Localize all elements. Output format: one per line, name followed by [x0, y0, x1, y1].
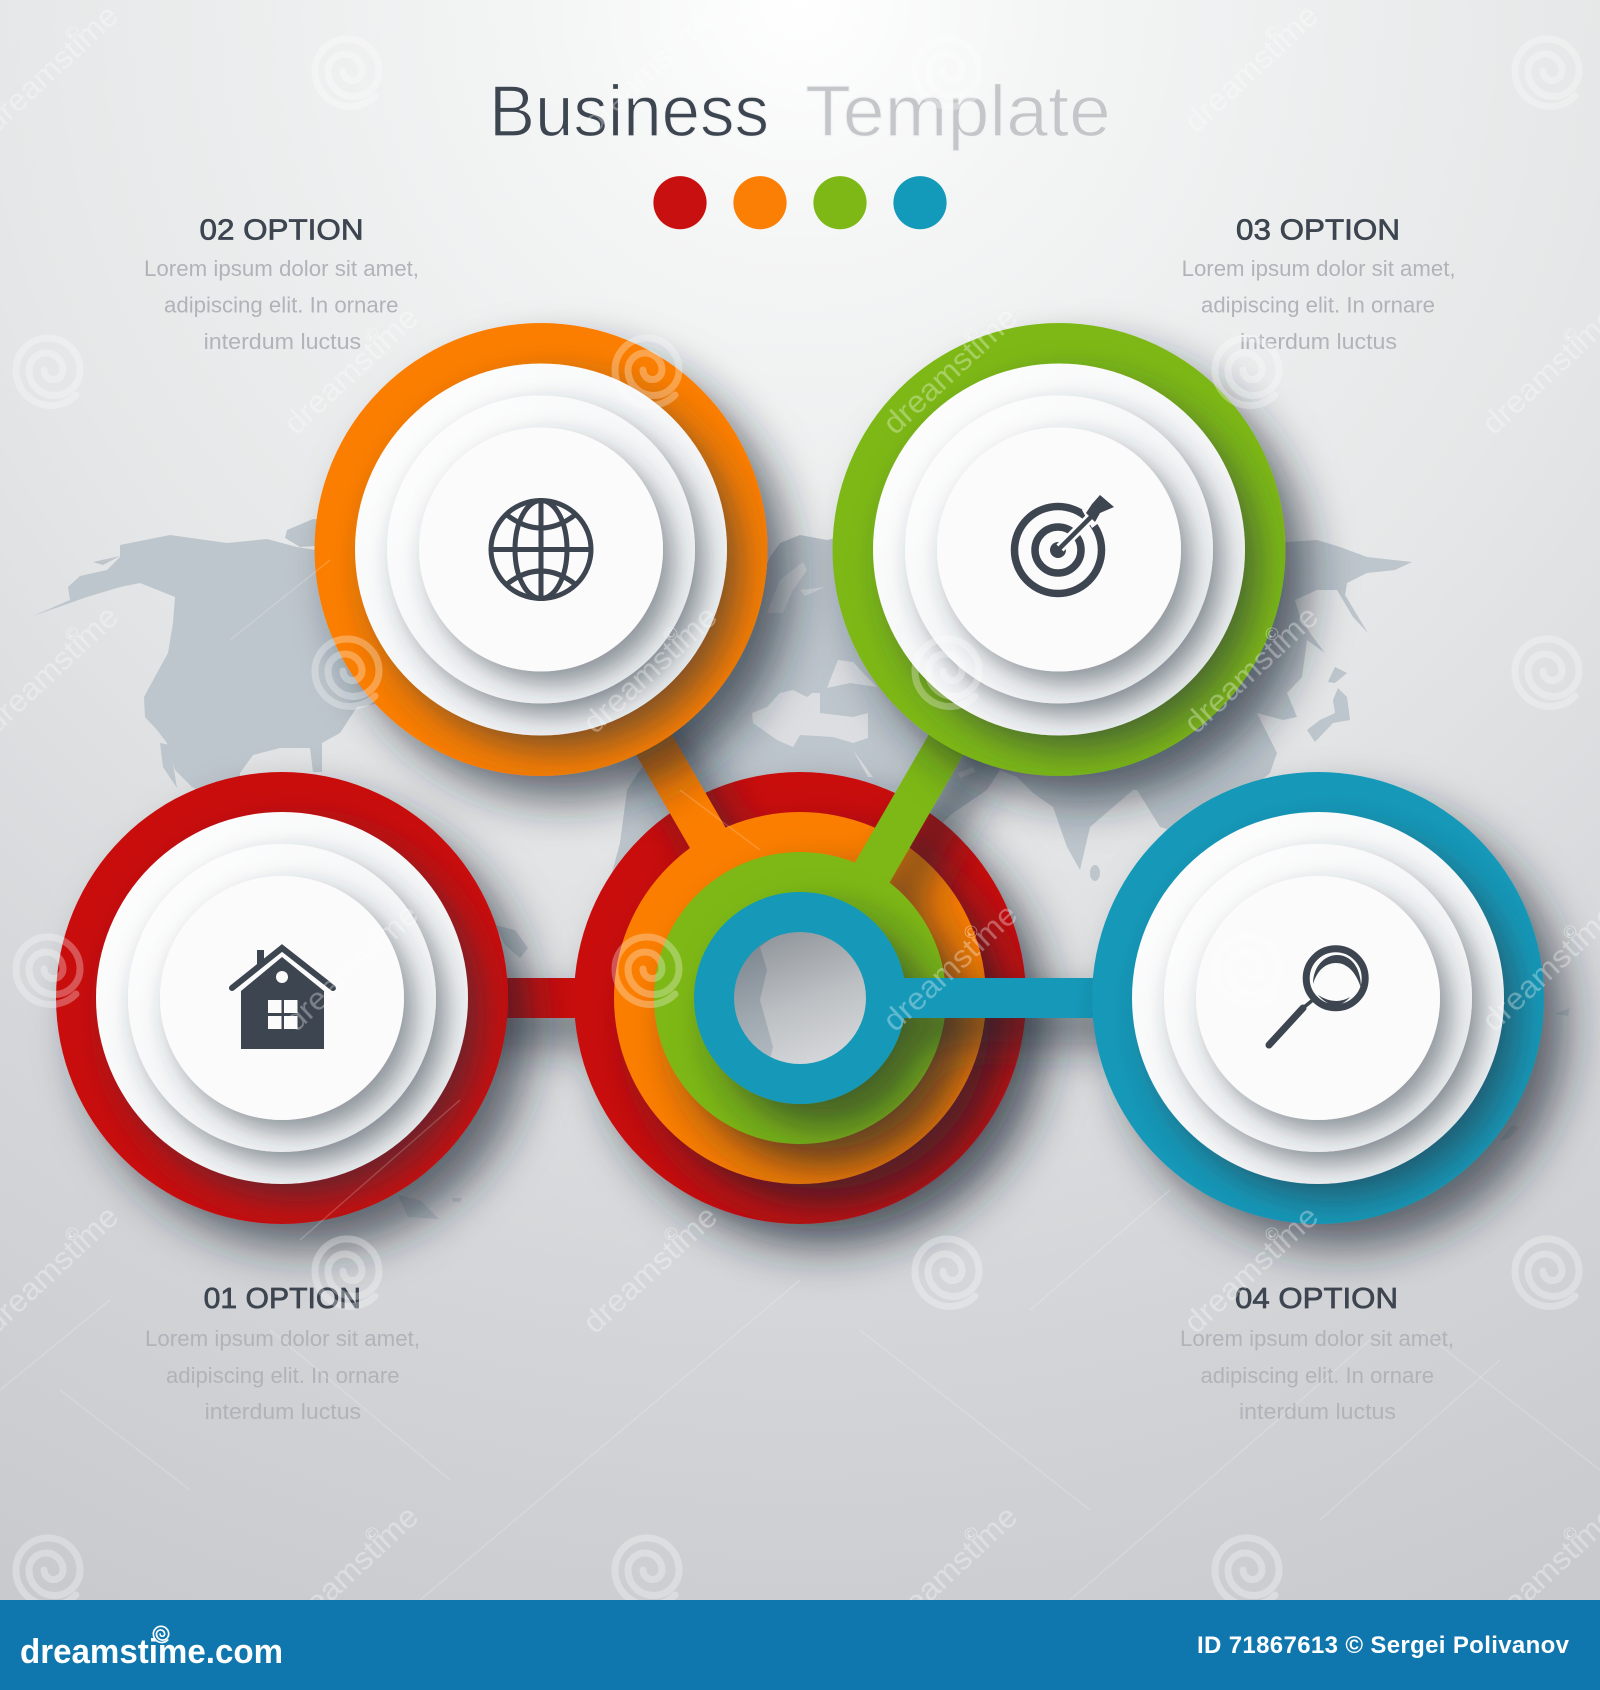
watermark: dreamstime text: dreamstime: [1177, 0, 1325, 139]
watermark: dreamstime text: ©: [959, 1522, 983, 1546]
white discs: option 01: [96, 812, 468, 1184]
text block: 02 option: interdum luctus: [204, 329, 361, 354]
watermark: dreamstime text: dreamstime: [277, 300, 425, 441]
map: baja and arctic islands: [93, 519, 330, 788]
watermark: dreamstime text: dreamstime: [876, 897, 1024, 1038]
text block: 04 option: adipiscing elit. In ornare: [1200, 1363, 1434, 1388]
icon: house: [232, 948, 333, 1049]
watermark: dreamstime text: dreamstime: [1177, 1199, 1325, 1340]
watermark: dreamstime text: ©: [360, 323, 384, 347]
watermark: dreamstime text: dreamstime: [576, 0, 724, 139]
text block: 01 option: 01 OPTION: [204, 1283, 361, 1315]
footer credit: ID 71867613 © Sergei Polivanov: [1197, 1632, 1570, 1659]
coloured rings and connectors: [56, 323, 1544, 1224]
center hole shade: [733, 931, 867, 1065]
watermark: dreamstime text: ©: [60, 622, 84, 646]
map: japan: [1307, 667, 1350, 742]
title: Template: [805, 72, 1111, 152]
watermark: dreamstime text: ©: [659, 622, 683, 646]
blue ring: option 04: [1092, 772, 1544, 1224]
watermark: dreamstime text: dreamstime: [277, 1499, 425, 1640]
watermark: dreamstime text: ©: [360, 920, 384, 944]
map: eurasia and africa: [610, 500, 1412, 1100]
center red ring with left connector: [498, 767, 1078, 1282]
text block: 04 option: Lorem ipsum dolor sit amet,: [1180, 1326, 1454, 1351]
text block: 04 option: interdum luctus: [1239, 1399, 1396, 1424]
icon: target with arrow: [1014, 494, 1116, 594]
watermark: dreamstime text: ©: [60, 1222, 84, 1246]
text block: 04 option: 04 OPTION: [1235, 1283, 1398, 1315]
orange ring: option 02: [314, 323, 768, 776]
map: sri lanka: [1090, 865, 1100, 881]
red ring: option 01: [56, 772, 508, 1224]
watermark: dreamstime text: ©: [959, 920, 983, 944]
watermark: dreamstime text: ©: [959, 323, 983, 347]
watermark: dreamstime text: ©: [1558, 1522, 1582, 1546]
title: Business: [489, 72, 769, 152]
text block: 03 option: adipiscing elit. In ornare: [1201, 292, 1435, 318]
watermark: dreamstime text: ©: [659, 21, 683, 45]
watermark: dreamstime text: dreamstime: [876, 1499, 1024, 1640]
text block: 02 option: 02 OPTION: [200, 214, 364, 246]
watermark: dreamstime text: dreamstime: [277, 897, 425, 1038]
footer logo spiral: [153, 1626, 169, 1643]
watermark: dreamstime text: dreamstime: [576, 599, 724, 740]
watermark: dreamstime text: ©: [659, 1222, 683, 1246]
footer bar: [0, 1600, 1600, 1690]
text block: 01 option: [145, 1283, 420, 1424]
white discs: option 02: [355, 364, 727, 736]
text block: 03 option: interdum luctus: [1240, 329, 1397, 354]
center green ring with connector: [646, 734, 1020, 1194]
map: north america: [33, 535, 400, 810]
icon: magnifier: [1269, 949, 1365, 1045]
watermark: dreamstime text: dreamstime: [576, 1199, 724, 1340]
watermark: dreamstime text: ©: [1260, 21, 1284, 45]
white discs: option 03: [873, 364, 1245, 736]
center blue ring with connector: [694, 892, 1220, 1104]
text block: 03 option: [1182, 214, 1456, 354]
world map: [33, 500, 1570, 1219]
colour dots: [653, 176, 947, 229]
watermark: dreamstime text: ©: [1558, 323, 1582, 347]
watermark: dreamstime text: ©: [60, 21, 84, 45]
watermark: dreamstime text: ©: [1260, 1222, 1284, 1246]
text block: 01 option: Lorem ipsum dolor sit amet,: [145, 1326, 420, 1351]
title: [489, 72, 1111, 152]
text block: 04 option: [1180, 1283, 1454, 1424]
text block: 02 option: adipiscing elit. In ornare: [164, 292, 398, 318]
map: baltic sea: [767, 562, 825, 613]
watermark: dreamstime text: dreamstime: [876, 300, 1024, 441]
map: seas: [752, 660, 975, 778]
text block: 02 option: Lorem ipsum dolor sit amet,: [144, 256, 419, 281]
white discs: option 04: [1132, 812, 1504, 1184]
icon: globe: [491, 500, 591, 599]
text block: 01 option: interdum luctus: [205, 1399, 361, 1424]
watermark: dreamstime text: dreamstime: [1177, 599, 1325, 740]
text block: 03 option: Lorem ipsum dolor sit amet,: [1182, 256, 1456, 281]
footer logo text: dreamstime.com: [20, 1633, 283, 1671]
text block: 02 option: [144, 214, 419, 354]
watermark: dreamstime text: ©: [1558, 920, 1582, 944]
green ring: option 03: [832, 323, 1286, 776]
center orange ring with connector: [607, 718, 1032, 1236]
text block: 03 option: 03 OPTION: [1236, 214, 1400, 246]
watermark: dreamstime text: ©: [1260, 622, 1284, 646]
watermark: dreamstime text: ©: [360, 1522, 384, 1546]
text block: 01 option: adipiscing elit. In ornare: [166, 1363, 400, 1388]
map: south america and australia fragments: [398, 925, 1570, 1219]
